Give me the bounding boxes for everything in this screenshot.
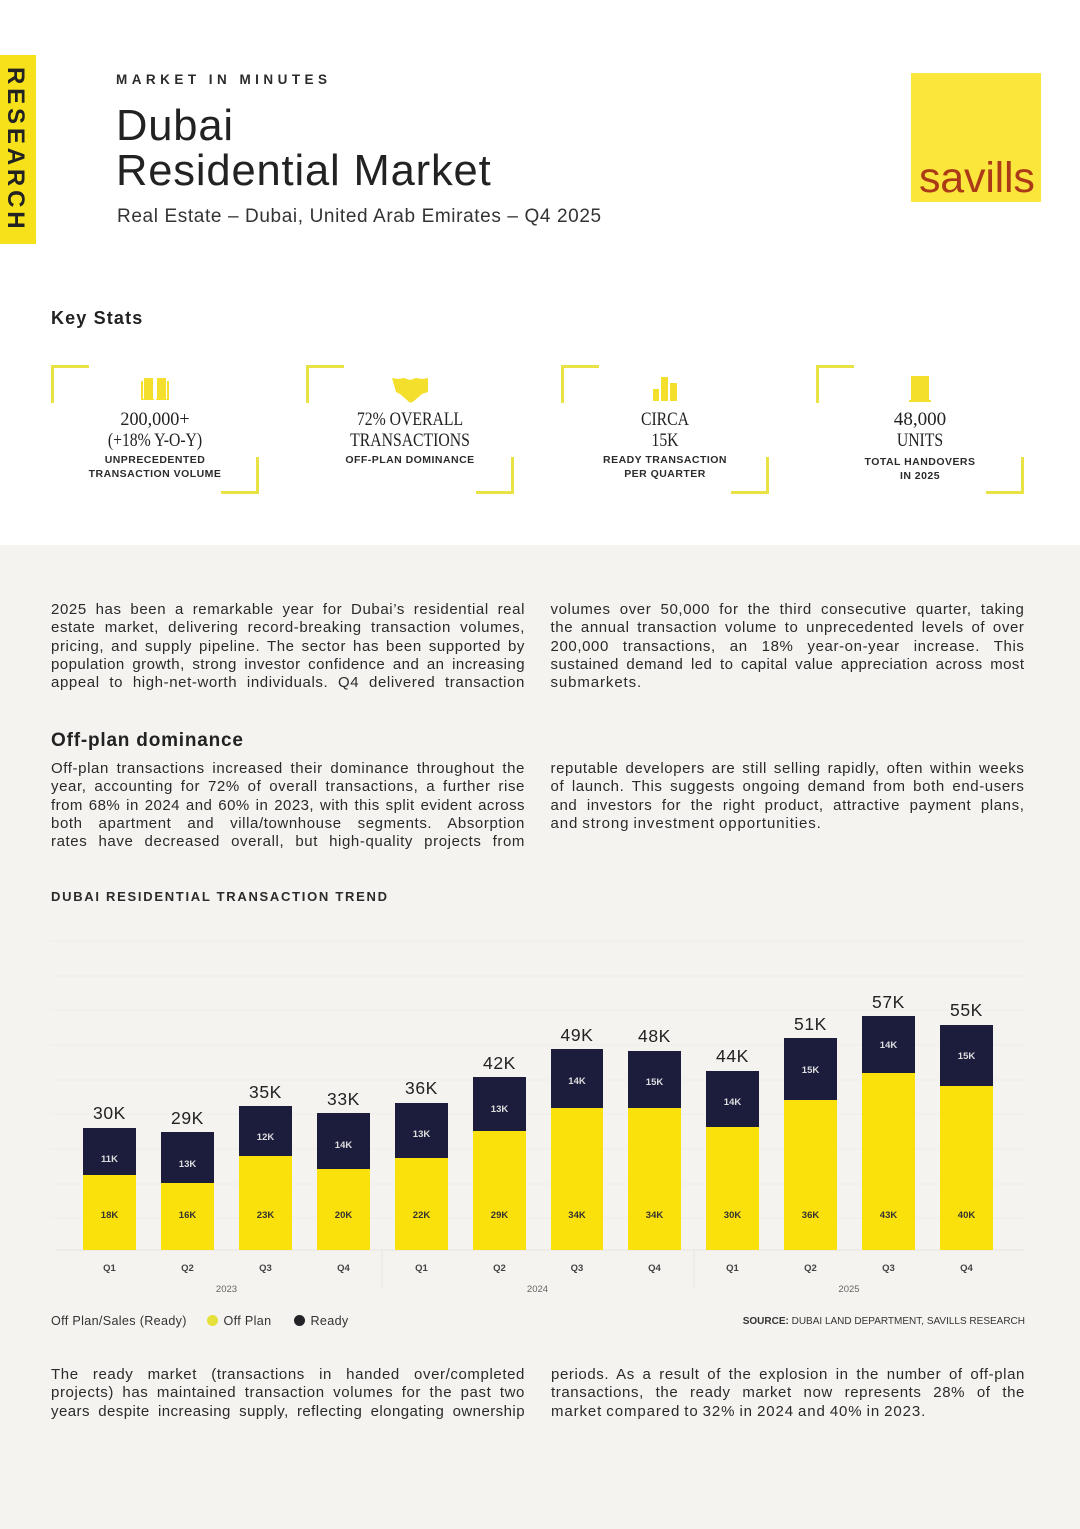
text block: ready market left: The ready market (transactions in handed over/completed	[51, 1366, 525, 1383]
year axis labels: 2024	[527, 1284, 548, 1295]
text block: intro left: 2025 has been a remarkable year for Dubai’s residential real	[51, 601, 525, 618]
text block: ready market right: periods. As a result of the explosion in the number of off-plan	[551, 1366, 1025, 1383]
stat label	[88, 454, 221, 480]
text block: intro left: appeal to high-net-worth individuals. Q4 delivered transaction	[51, 674, 525, 691]
bar: Q2 2023	[161, 1108, 214, 1274]
bar: Q3 2024: 34K	[568, 1210, 586, 1221]
chart title: DUBAI RESIDENTIAL TRANSACTION TREND	[51, 889, 389, 904]
icon: bar chart	[653, 377, 677, 401]
bar: Q2 2025	[784, 1014, 837, 1274]
stat label: UNPRECEDENTED	[105, 454, 205, 466]
bar: Q3 2024	[551, 1025, 603, 1274]
bar: Q3 2023: 12K	[257, 1132, 274, 1143]
bar: Q4 2024: 48K	[638, 1026, 671, 1046]
text block: ready market left: years despite increasing supply, reflecting elongating ownership	[51, 1402, 525, 1420]
text block: off-plan right: and investors for the right product, attractive payment plans,	[550, 796, 1024, 814]
stat label: TRANSACTION VOLUME	[89, 468, 221, 480]
bar: Q2 2024: 29K	[491, 1210, 508, 1221]
stat value: TRANSACTIONS	[350, 430, 470, 450]
year axis labels	[216, 1284, 860, 1295]
bar: Q4 2024	[628, 1026, 681, 1274]
subtitle: Real Estate – Dubai, United Arab Emirates – Q4 2025	[117, 206, 602, 227]
bar: Q4 2023: 14K	[335, 1140, 352, 1151]
title: Residential Market	[116, 146, 492, 194]
bracket frame	[561, 365, 769, 494]
bar: Q2 2024: Q2	[493, 1263, 506, 1274]
bar: Q2 2025: Q2	[804, 1263, 817, 1274]
bar: Q1 2024: Q1	[415, 1263, 429, 1274]
stat card: total handovers	[816, 365, 1024, 494]
stat card: transaction volume	[51, 365, 259, 494]
bar: Q2 2023: 29K	[171, 1108, 204, 1128]
icon: open book	[141, 378, 169, 400]
legend label: off plan: Off Plan	[224, 1314, 271, 1328]
heading: off-plan dominance: Off-plan dominance	[51, 730, 244, 751]
stat label: READY TRANSACTION	[603, 454, 727, 466]
bar: Q3 2023: 23K	[257, 1210, 274, 1221]
stat value: 72% OVERALL	[357, 410, 463, 430]
stat label: PER QUARTER	[624, 468, 706, 480]
stat value	[108, 410, 202, 450]
text block: off-plan right: and strong investment opportunities.	[550, 815, 822, 832]
stat value	[641, 410, 689, 450]
bar: Q2 2023: Q2	[181, 1263, 194, 1274]
logo wordmark: savills	[919, 154, 1035, 202]
bar: Q4 2025: 55K	[950, 1000, 983, 1020]
bar: Q3 2023: 35K	[249, 1082, 282, 1102]
stat label: OFF-PLAN DOMINANCE	[345, 454, 475, 466]
bar: Q1 2023	[83, 1103, 136, 1274]
text block: ready market right	[551, 1366, 1025, 1420]
heading: key stats: Key Stats	[51, 308, 143, 328]
bar: Q4 2025: 15K	[958, 1051, 975, 1062]
stat value	[350, 410, 470, 450]
logo: savills	[911, 73, 1041, 202]
bar: Q3 2025: 43K	[880, 1210, 897, 1221]
bar: Q1 2024: 36K	[405, 1078, 438, 1098]
bar: Q2 2024	[473, 1053, 526, 1274]
bar: Q1 2023: 18K	[101, 1210, 118, 1221]
text block: intro left: pricing, and supply pipeline. The sector has been supported by	[51, 638, 525, 654]
text block: ready market left: projects) has maintained transaction volumes for the past two	[51, 1384, 525, 1401]
text block: intro right: submarkets.	[550, 674, 642, 691]
bar: Q4 2024: Q4	[648, 1263, 662, 1274]
bar: Q3 2024: Q3	[571, 1263, 583, 1274]
bracket frame	[306, 365, 514, 494]
bar: Q3 2025: 57K	[872, 992, 905, 1012]
bar: Q1 2023: 11K	[101, 1154, 118, 1165]
stat label	[864, 456, 975, 482]
text block: ready market right: market compared to 32% in 2024 and 40% in 2023.	[551, 1402, 926, 1420]
bar: Q4 2025: 40K	[958, 1210, 975, 1221]
year axis labels: 2023	[216, 1284, 237, 1295]
source note: SOURCE: DUBAI LAND DEPARTMENT, SAVILLS RESEARCH	[743, 1316, 1025, 1327]
legend swatch: off plan	[207, 1314, 218, 1326]
text block: off-plan right: reputable developers are still selling rapidly, often within weeks	[550, 760, 1024, 777]
bar: Q4 2023	[317, 1089, 370, 1274]
bar: Q4 2023: Q4	[337, 1263, 351, 1274]
text block: intro left	[51, 601, 525, 691]
stacked bar chart: residential transactions	[55, 992, 1025, 1295]
panel: grey body background	[0, 545, 1080, 1529]
text block: ready market right: transactions, the ready market now represents 28% of the	[551, 1384, 1025, 1401]
text block: off-plan left: rates have decreased overall, but high-quality projects from	[51, 833, 525, 850]
stat value: 15K	[651, 430, 679, 450]
text block: intro right: 200,000 transactions, an 18% year-on-year increase. This	[550, 638, 1024, 654]
chart legend	[51, 1314, 349, 1328]
bar: Q4 2025: Q4	[960, 1263, 974, 1274]
bar: Q1 2025: Q1	[726, 1263, 740, 1274]
legend label: ready: Ready	[310, 1314, 349, 1328]
bar: Q2 2025: 36K	[802, 1210, 819, 1221]
bar: Q2 2025: 15K	[802, 1065, 819, 1076]
text block: ready market left	[51, 1366, 525, 1420]
side tab label: RESEARCH	[2, 67, 29, 232]
bracket frame	[816, 365, 1024, 494]
stat value: CIRCA	[641, 410, 689, 430]
title	[116, 102, 492, 194]
bar: Q3 2024: 49K	[561, 1025, 593, 1045]
stat card: off-plan dominance	[306, 365, 514, 494]
side tab: research	[0, 55, 36, 244]
bar: Q2 2025: 51K	[794, 1014, 827, 1034]
bar: Q2 2023: 13K	[179, 1159, 196, 1170]
stat value	[894, 410, 946, 450]
bar: Q3 2025: 14K	[880, 1040, 897, 1051]
legend title: Off Plan/Sales (Ready)	[51, 1314, 187, 1328]
icon: handshake	[392, 378, 428, 402]
stat label	[603, 454, 727, 480]
text block: intro left: estate market, delivering record-breaking transaction volumes,	[51, 619, 525, 636]
text block: intro right: sustained demand led to capital value appreciation across most	[550, 656, 1024, 673]
text block: off-plan left: Off-plan transactions increased their dominance throughout the	[51, 760, 525, 777]
bar: Q1 2025: 44K	[716, 1046, 749, 1066]
bar: Q3 2024: 14K	[568, 1076, 586, 1087]
text block: off-plan right: of launch. This suggests ongoing demand from both end-users	[550, 778, 1024, 795]
bar: Q4 2024: 15K	[646, 1077, 663, 1088]
bar: Q2 2024: 42K	[483, 1053, 516, 1073]
stat value: 200,000+	[120, 410, 190, 430]
year axis labels: 2025	[838, 1284, 860, 1295]
bar: Q1 2025	[706, 1046, 759, 1274]
text block: off-plan right	[550, 760, 1024, 832]
text block: off-plan left: both apartment and villa/townhouse segments. Absorption	[51, 815, 525, 832]
bar: Q1 2023: Q1	[103, 1263, 117, 1274]
stat value: 48,000	[894, 410, 946, 430]
bar: Q4 2025	[940, 1000, 993, 1274]
bar: Q2 2024: 13K	[491, 1104, 508, 1115]
bar: Q1 2024: 13K	[413, 1129, 430, 1140]
stat label: TOTAL HANDOVERS	[865, 456, 975, 468]
text block: intro right: volumes over 50,000 for the third consecutive quarter, taking	[550, 601, 1024, 618]
legend swatch: ready	[294, 1314, 305, 1326]
text block: intro right: the annual transaction volume to unprecedented levels of over	[550, 619, 1024, 636]
bar: Q3 2025: Q3	[882, 1263, 895, 1274]
bar: Q1 2025: 14K	[724, 1097, 741, 1108]
stat value: (+18% Y-O-Y)	[108, 430, 202, 450]
header: eyebrow: MARKET IN MINUTES	[116, 72, 332, 87]
bar: Q3 2023	[239, 1082, 292, 1274]
icon: building	[909, 376, 931, 402]
bar: Q4 2023: 33K	[327, 1089, 360, 1109]
bar: Q1 2024: 22K	[413, 1210, 430, 1221]
bracket frame	[51, 365, 259, 494]
bar: Q3 2025	[862, 992, 915, 1274]
stat card: ready transactions	[561, 365, 769, 494]
bar: Q3 2023: Q3	[259, 1263, 272, 1274]
text block: off-plan left: year, accounting for 72% of overall transactions, a further rise	[51, 778, 525, 795]
stat label: IN 2025	[900, 470, 940, 482]
text block: intro right	[550, 601, 1024, 691]
stat value: UNITS	[897, 430, 943, 450]
text block: intro left: population growth, strong investor confidence and an increasing	[51, 656, 525, 673]
bar: Q1 2023: 30K	[93, 1103, 126, 1123]
bar: Q1 2024	[395, 1078, 448, 1274]
text block: off-plan left	[51, 760, 525, 850]
text block: off-plan left: from 68% in 2024 and 60% in 2023, with this split evident across	[51, 796, 525, 814]
bar: Q1 2025: 30K	[724, 1210, 741, 1221]
bar: Q4 2023: 20K	[335, 1210, 352, 1221]
title: Dubai	[116, 102, 234, 150]
bar: Q2 2023: 16K	[179, 1210, 196, 1221]
bar: Q4 2024: 34K	[646, 1210, 663, 1221]
